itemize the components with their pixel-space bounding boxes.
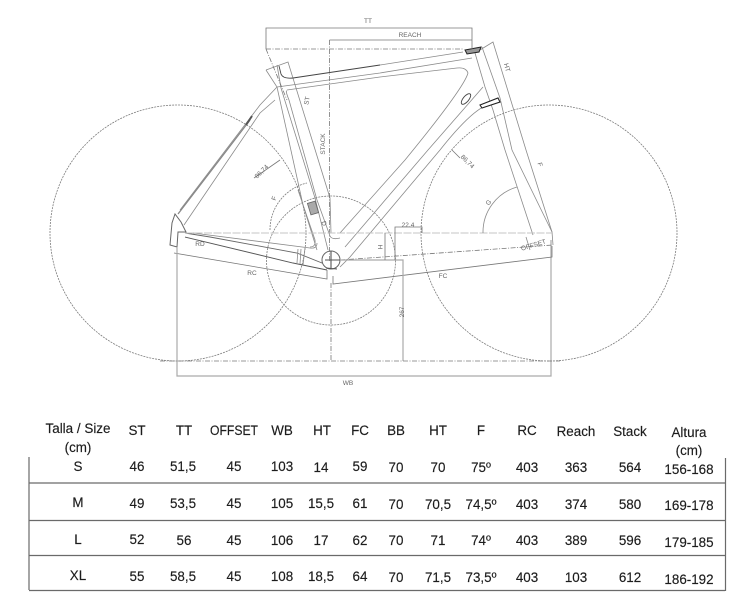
row XL: 55: [130, 569, 144, 584]
dimension labels: WB: [343, 380, 353, 387]
dimension labels: H: [376, 245, 383, 250]
table: size chart: [29, 421, 726, 591]
row L: 403: [516, 533, 538, 548]
row XL: 612: [619, 570, 641, 585]
row M: 15,5: [308, 496, 334, 511]
front wheel: [421, 105, 677, 361]
table header: Talla / Size: [46, 421, 110, 436]
row S: S: [74, 459, 83, 474]
row S: 51,5: [170, 459, 196, 474]
dimension labels: [195, 18, 547, 387]
dimension labels: REACH: [399, 32, 422, 39]
table header: WB: [271, 423, 293, 438]
table header: OFFSET: [210, 423, 258, 438]
diagram: bicycle frame geometry: [50, 18, 677, 387]
row S: 564: [619, 460, 642, 475]
row L: 596: [619, 533, 641, 548]
row S: 403: [516, 460, 538, 475]
row XL: 73,5º: [466, 570, 497, 585]
rear wheel: [50, 105, 306, 361]
row XL: 186-192: [664, 572, 714, 587]
row M: 169-178: [664, 498, 714, 513]
dimension labels: RD: [195, 241, 205, 248]
row L: 74º: [471, 533, 491, 548]
row M: 49: [130, 496, 144, 511]
row XL: 403: [516, 570, 538, 585]
row L: 52: [130, 532, 144, 547]
icon: bottom bracket: [322, 251, 340, 269]
table header: HT: [429, 423, 447, 438]
row XL: 64: [353, 569, 368, 584]
icon: upper headset bearing: [465, 47, 481, 54]
dimension labels: ST: [303, 96, 312, 105]
frame: head tube and fork: [475, 42, 553, 245]
table header: TT: [176, 423, 192, 438]
row XL: [70, 568, 714, 587]
table header: HT: [313, 423, 331, 438]
row S: 45: [227, 459, 241, 474]
frame: seat stay: [178, 87, 277, 225]
table header: RC: [517, 423, 537, 438]
table header: BB: [387, 423, 405, 438]
dimension labels: 267: [399, 306, 406, 317]
dimension labels: TT: [364, 18, 372, 25]
icon: lower headset bearing: [480, 98, 500, 108]
dimension labels: F: [536, 162, 543, 167]
row L: 106: [271, 533, 293, 548]
row L: 45: [227, 533, 241, 548]
row L: 179-185: [664, 535, 714, 550]
dimension labels: STACK: [320, 133, 327, 155]
crank circle: [266, 196, 396, 325]
dimension lines: [160, 28, 560, 376]
row XL: 103: [565, 570, 587, 585]
row L: 62: [353, 533, 367, 548]
row S: 156-168: [664, 462, 714, 477]
row S: [74, 459, 714, 477]
row S: 363: [565, 460, 587, 475]
row S: 14: [314, 460, 329, 475]
table header: Stack: [613, 424, 647, 439]
row S: 59: [353, 459, 367, 474]
row XL: 70: [389, 570, 403, 585]
row L: 70: [389, 533, 403, 548]
frame: top tube: [277, 52, 472, 90]
row M: 374: [565, 497, 588, 512]
dimension labels: 86,74: [459, 154, 476, 170]
row L: 56: [177, 533, 191, 548]
row L: 17: [314, 533, 328, 548]
row M: M: [72, 495, 84, 510]
row M: 105: [271, 496, 293, 511]
row XL: 108: [271, 569, 293, 584]
dimension labels: HT: [502, 63, 511, 73]
row M: 74,5º: [466, 497, 497, 512]
dimension labels: G: [485, 199, 493, 207]
row M: [72, 495, 714, 513]
row XL: 18,5: [308, 569, 334, 584]
row M: 403: [516, 497, 538, 512]
row XL: XL: [70, 568, 86, 583]
frame: down tube: [340, 73, 487, 267]
dimension labels: FC: [439, 273, 448, 280]
row M: 53,5: [170, 496, 196, 511]
table header: Altura: [672, 425, 707, 440]
frame: seat tube: [266, 62, 340, 250]
row XL: 58,5: [170, 569, 196, 584]
row S: 46: [130, 459, 144, 474]
table header: Reach: [557, 424, 595, 439]
dimension labels: 86,74: [254, 163, 270, 180]
dimension labels: F: [271, 195, 279, 202]
row M: 70: [389, 497, 403, 512]
row M: 45: [227, 496, 241, 511]
row M: 61: [353, 496, 367, 511]
table header: ST: [128, 423, 146, 438]
dimension labels: OFFSET: [520, 238, 547, 253]
row M: 70,5: [425, 497, 451, 512]
row L: 71: [431, 533, 445, 548]
row XL: 45: [227, 569, 241, 584]
table borders: [29, 457, 726, 591]
row M: 580: [619, 497, 641, 512]
row S: 75º: [471, 460, 491, 475]
row S: 70: [389, 460, 403, 475]
row XL: 71,5: [425, 570, 451, 585]
table header: F: [477, 423, 485, 438]
dimension labels: D: [319, 220, 328, 227]
row L: L: [74, 532, 82, 547]
row L: [74, 532, 714, 550]
frame: rear dropout: [170, 214, 186, 247]
table header: (cm): [676, 443, 702, 458]
frame: chain stay: [185, 233, 327, 270]
table header: (cm): [65, 440, 91, 455]
table header: [46, 421, 707, 458]
table header: FC: [351, 423, 369, 438]
row L: 389: [565, 533, 587, 548]
dimension labels: 22.4: [402, 222, 415, 229]
icon: cable port oval: [460, 92, 472, 106]
row S: 70: [431, 460, 445, 475]
row S: 103: [271, 459, 293, 474]
dimension labels: RC: [247, 270, 257, 277]
icon: bottle cage bolts: [307, 201, 319, 215]
